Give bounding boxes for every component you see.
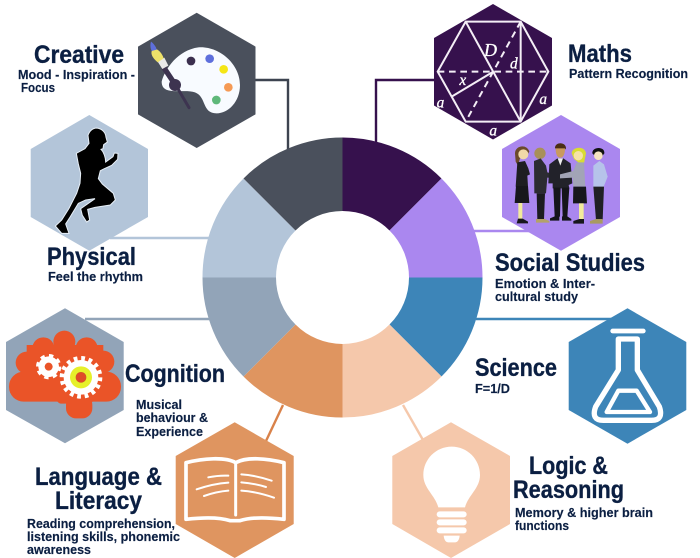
cognition caption	[136, 398, 208, 439]
panel: creative	[18, 13, 256, 148]
creative caption: Mood - Inspiration -	[18, 68, 135, 82]
logic heading	[513, 452, 624, 504]
panel: language and literacy	[27, 422, 294, 558]
icon: open book	[186, 459, 284, 521]
panel: physical	[31, 115, 148, 284]
social studies caption	[495, 277, 595, 304]
man three	[548, 143, 572, 221]
science caption: F=1/D	[475, 382, 510, 396]
social studies caption: Emotion & Inter-	[495, 277, 595, 291]
language heading: Literacy	[55, 487, 142, 515]
science heading: Science	[475, 354, 557, 382]
maths heading: Maths	[568, 40, 632, 68]
icon: geometry diagram: d	[510, 55, 518, 72]
language caption: Reading comprehension,	[27, 517, 175, 531]
language caption: listening skills, phonemic	[27, 530, 180, 544]
language caption: awareness	[27, 543, 91, 557]
cognition heading: Cognition	[125, 360, 225, 388]
language hexagon	[176, 422, 294, 558]
icon: geometry diagram: a	[539, 91, 547, 108]
icon: group of people	[515, 143, 608, 224]
science hexagon	[569, 308, 686, 444]
man five	[590, 148, 608, 224]
logic heading: Reasoning	[513, 476, 624, 504]
creative caption	[18, 68, 135, 95]
physical heading: Physical	[47, 243, 136, 271]
connector lines	[85, 80, 612, 441]
cognition caption: Experience	[136, 425, 203, 439]
cognition caption: Musical	[136, 398, 182, 412]
icon: palette	[150, 42, 240, 113]
social studies heading: Social Studies	[495, 249, 645, 277]
logic hexagon	[392, 422, 510, 558]
logic caption: functions	[515, 519, 569, 533]
panel: cognition	[6, 308, 225, 443]
logic caption: Memory & higher brain	[515, 506, 653, 520]
woman one	[515, 146, 530, 223]
physical hexagon	[31, 115, 148, 251]
panel: maths	[434, 4, 688, 140]
physical caption: Feel the rhythm	[48, 270, 143, 284]
icon: geometry diagram: a	[437, 94, 445, 111]
language heading	[35, 463, 162, 515]
language heading: Language &	[35, 463, 162, 491]
icon: light bulb	[423, 447, 480, 542]
icon: geometry diagram: a	[489, 122, 497, 139]
maths caption: Pattern Recognition	[569, 67, 688, 81]
panel: logic and reasoning	[392, 422, 653, 558]
icon: geometry diagram: x	[458, 72, 466, 89]
cognition hexagon	[6, 308, 124, 443]
social studies caption: cultural study	[495, 290, 578, 304]
donut chart	[202, 137, 482, 418]
maths hexagon	[434, 4, 552, 140]
creative caption: Focus	[21, 81, 55, 95]
language caption	[27, 517, 180, 557]
social studies hexagon	[502, 115, 620, 251]
woman four	[560, 148, 587, 224]
creative hexagon	[138, 13, 256, 148]
logic heading: Logic &	[529, 452, 608, 480]
icon: geometry diagram	[437, 22, 548, 139]
icon: geometry diagram: D	[483, 40, 497, 60]
creative heading: Creative	[34, 41, 124, 69]
panel: science	[475, 308, 686, 444]
icon: brain with gears	[9, 331, 121, 418]
panel: social studies	[495, 115, 645, 304]
icon: runner	[55, 128, 118, 233]
cognition caption: behaviour &	[136, 411, 208, 425]
logic caption	[515, 506, 653, 533]
man two	[534, 148, 557, 223]
icon: flask	[594, 331, 661, 420]
